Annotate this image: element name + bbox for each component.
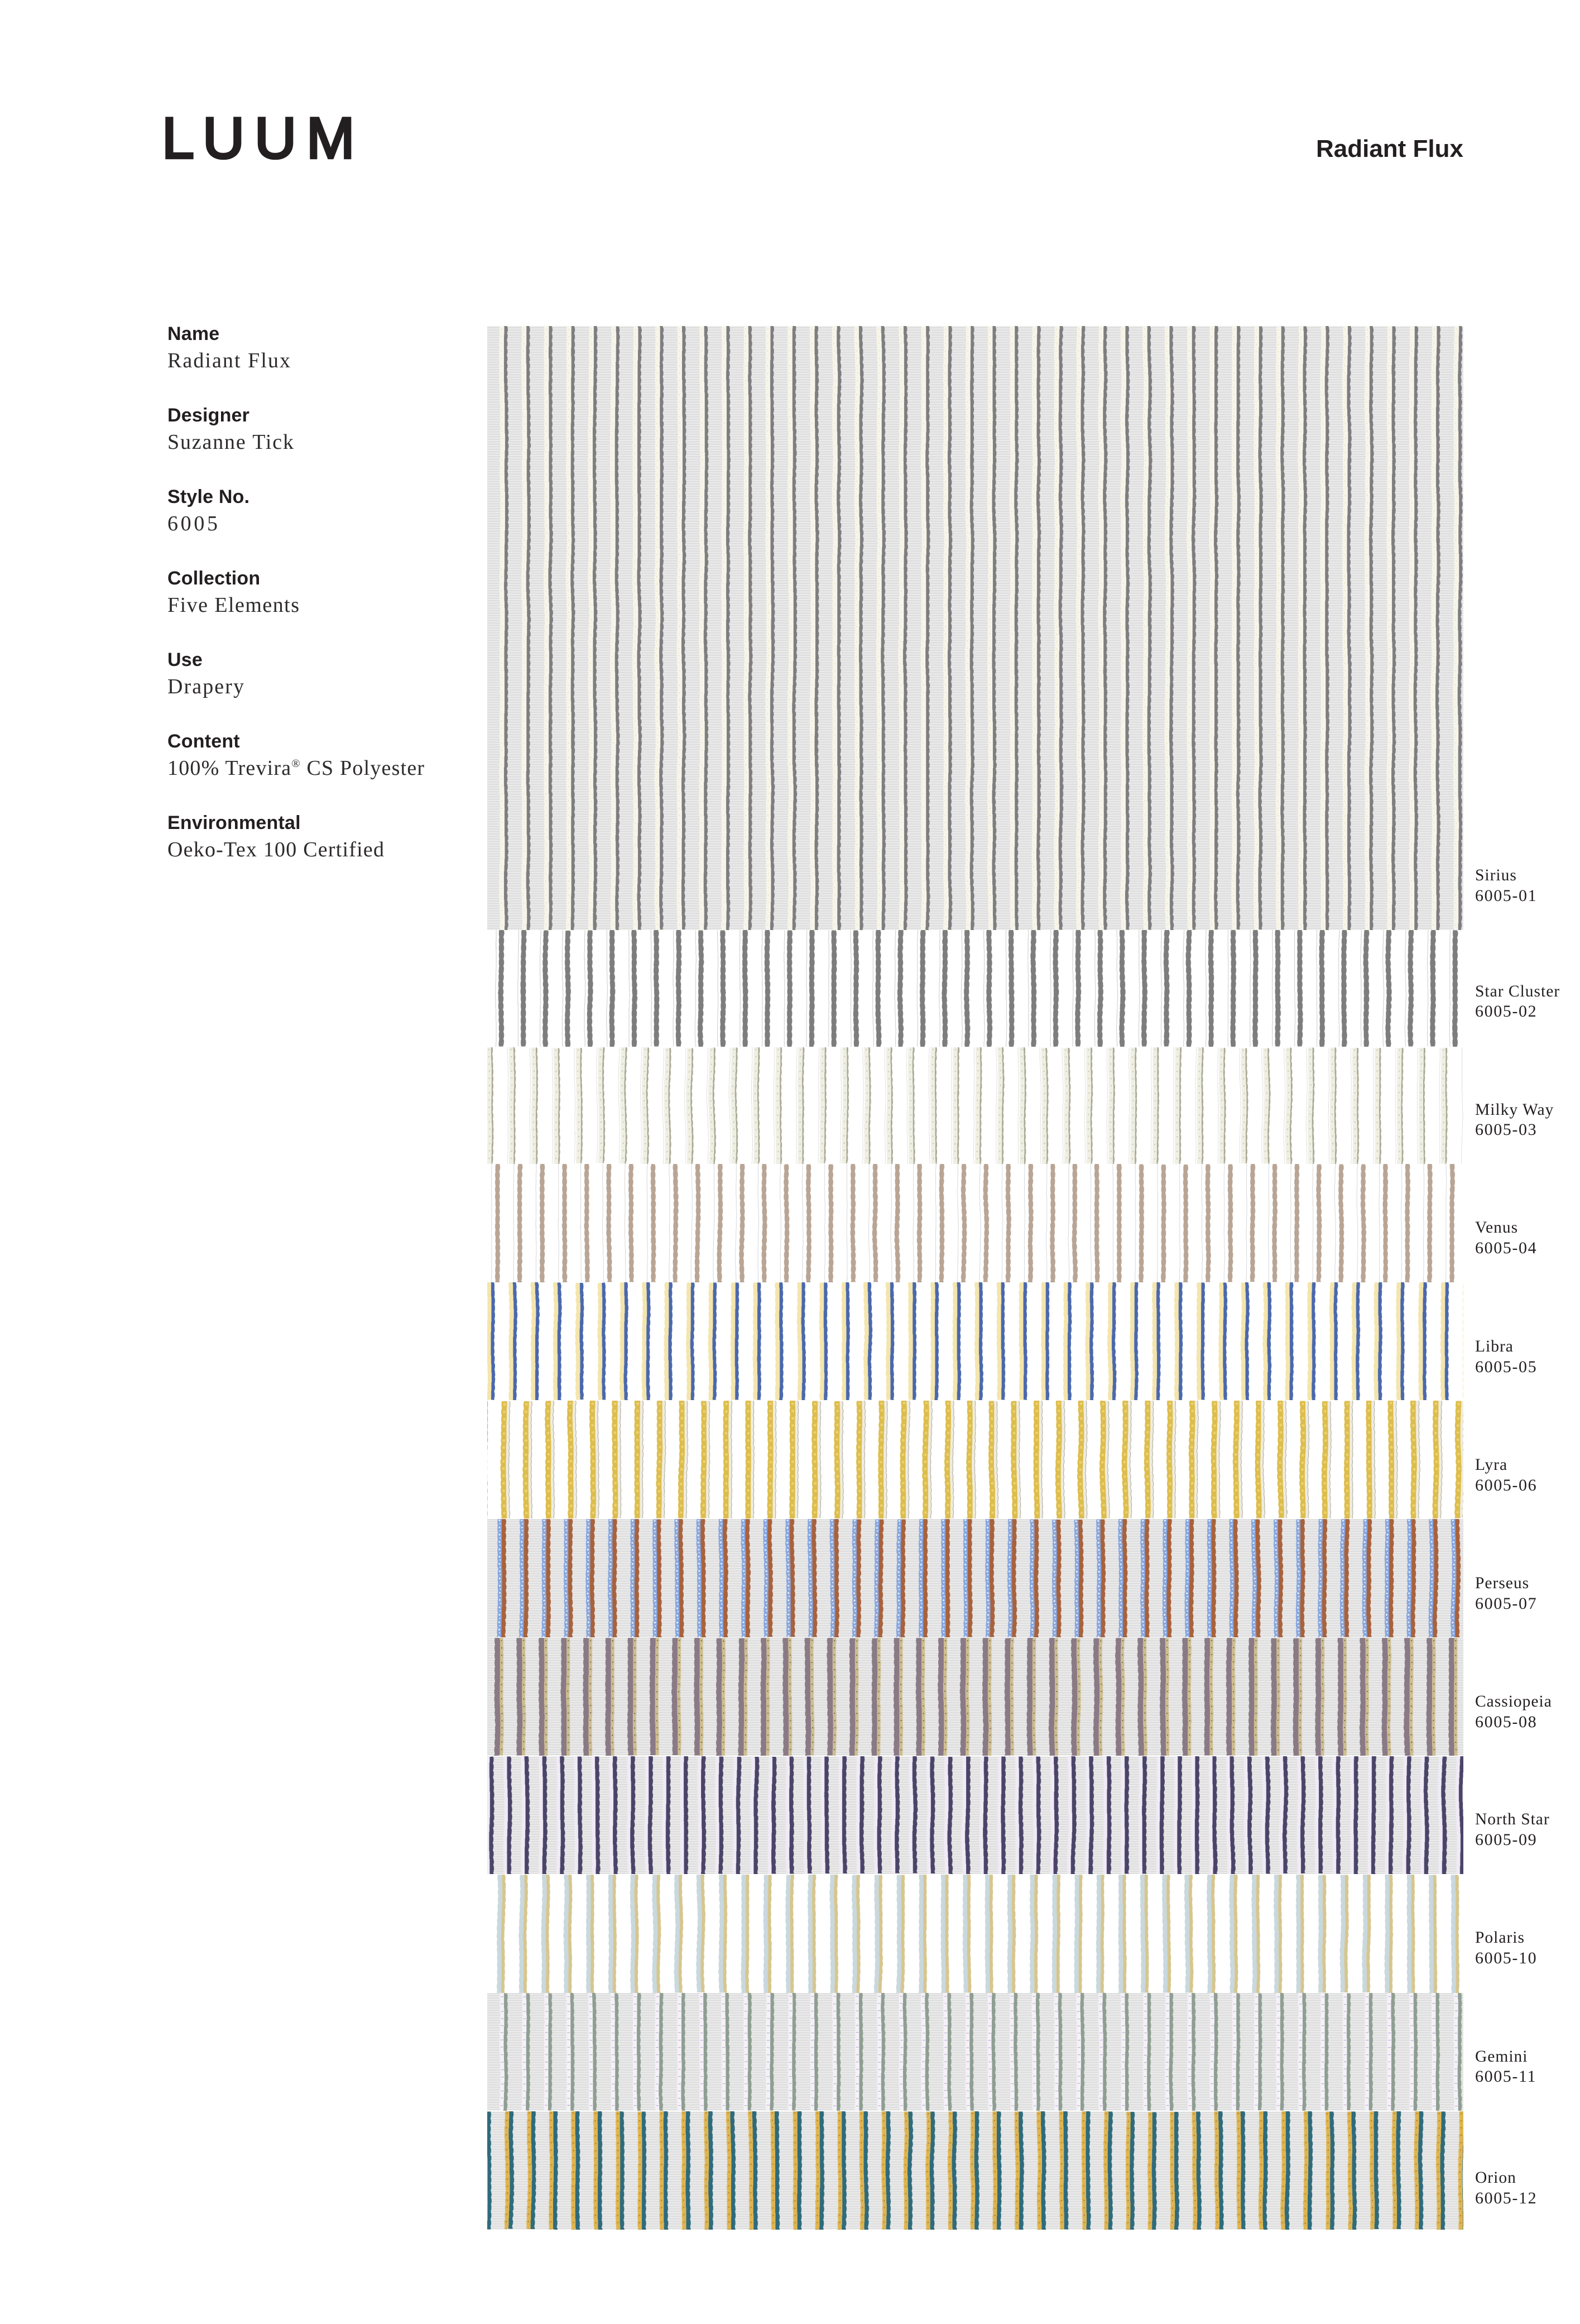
spec: Use: [167, 649, 244, 698]
spec: Style No.: [167, 486, 249, 535]
spec: Collection: Five Elements: [167, 593, 299, 617]
label: Lyra: [1475, 1456, 1537, 1494]
spec: Designer: Designer: [167, 405, 249, 426]
label: Cassiopeia: [1475, 1693, 1552, 1731]
spec: Designer: Suzanne Tick: [167, 430, 294, 454]
label: North Star: North Star: [1475, 1810, 1550, 1828]
label: Gemini: [1475, 2048, 1536, 2086]
label: Sirius: 6005-01: [1475, 887, 1537, 905]
label: Gemini: 6005-11: [1475, 2067, 1536, 2086]
label: Star Cluster: Star Cluster: [1475, 983, 1560, 1000]
label: Star Cluster: [1475, 983, 1560, 1020]
spec: Collection: Collection: [167, 568, 260, 589]
spec: Designer: [167, 405, 294, 454]
spec: Content: Content: [167, 731, 240, 752]
label: Polaris: [1475, 1929, 1537, 1967]
label: Milky Way: [1475, 1101, 1554, 1139]
label: North Star: [1475, 1810, 1550, 1849]
spec: Collection: [167, 568, 299, 617]
spec: Environmental: [167, 812, 384, 861]
label: Cassiopeia: 6005-08: [1475, 1713, 1537, 1731]
label: Polaris: 6005-10: [1475, 1949, 1537, 1967]
swatch: Star Cluster 6005-02: [487, 930, 1463, 1047]
spec: Name: Name: [167, 323, 219, 344]
title: Radiant Flux: Radiant Flux: [1316, 135, 1464, 162]
swatch: Gemini 6005-11: [487, 1993, 1463, 2111]
label: Milky Way: 6005-03: [1475, 1120, 1537, 1139]
swatch: Cassiopeia 6005-08: [487, 1638, 1463, 1756]
swatch: Orion 6005-12: [487, 2111, 1463, 2230]
label: Venus: 6005-04: [1475, 1239, 1537, 1257]
label: Orion: 6005-12: [1475, 2189, 1537, 2207]
label: Cassiopeia: Cassiopeia: [1475, 1693, 1552, 1710]
panel: product specifications: [167, 323, 425, 861]
swatch: Polaris 6005-10: [487, 1875, 1463, 1993]
label: North Star: 6005-09: [1475, 1831, 1537, 1849]
swatch: Lyra 6005-06: [487, 1401, 1463, 1518]
label: Sirius: [1475, 866, 1537, 905]
label: Milky Way: Milky Way: [1475, 1101, 1554, 1119]
spec: Use: Use: [167, 649, 203, 670]
swatch: Sirius 6005-01: [487, 326, 1463, 930]
label: Libra: Libra: [1475, 1338, 1514, 1355]
swatch: Milky Way 6005-03: [487, 1047, 1463, 1164]
swatch: Libra 6005-05: [487, 1282, 1463, 1400]
label: Star Cluster: 6005-02: [1475, 1002, 1537, 1020]
swatch: North Star 6005-09: [487, 1756, 1463, 1874]
label: Polaris: Polaris: [1475, 1929, 1525, 1947]
label: Lyra: 6005-06: [1475, 1476, 1537, 1494]
spec: Use: Drapery: [167, 675, 244, 698]
swatch: Perseus 6005-07: [487, 1519, 1463, 1637]
spec: Environmental: Environmental: [167, 812, 301, 833]
swatch: Venus 6005-04: [487, 1164, 1463, 1282]
logo: LUUM wordmark: LUUM: [162, 106, 355, 171]
spec: Style No.: Style No.: [167, 486, 249, 507]
label: Gemini: Gemini: [1475, 2048, 1528, 2066]
label: Libra: 6005-05: [1475, 1358, 1537, 1376]
spec: Name: Radiant Flux: [167, 349, 290, 372]
spec: Style No.: 6005: [167, 512, 218, 535]
label: Venus: [1475, 1219, 1537, 1257]
label: Orion: [1475, 2169, 1537, 2207]
spec: Name: [167, 323, 290, 372]
panel: colorway labels: [1475, 866, 1560, 2207]
panel: fabric colorway swatches: [487, 326, 1463, 2230]
spec: Content: CS Polyester: [301, 756, 425, 780]
label: Orion: Orion: [1475, 2169, 1516, 2187]
label: Lyra: Lyra: [1475, 1456, 1507, 1474]
label: Perseus: 6005-07: [1475, 1594, 1537, 1613]
label: Sirius: Sirius: [1475, 866, 1517, 884]
label: Perseus: Perseus: [1475, 1574, 1529, 1592]
spec: Content: 100% Trevira: [167, 756, 291, 780]
label: Perseus: [1475, 1574, 1537, 1613]
label: Libra: [1475, 1338, 1537, 1376]
spec: Environmental: Oeko-Tex 100 Certified: [167, 838, 384, 861]
spec: Content: ®: [291, 758, 301, 770]
label: Venus: Venus: [1475, 1219, 1518, 1237]
spec: Content: [167, 731, 425, 780]
